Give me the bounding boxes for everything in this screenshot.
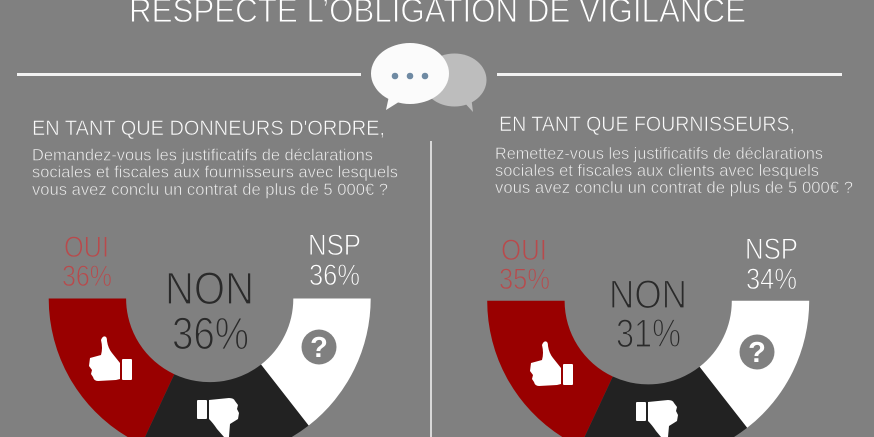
icon: thumb down <box>197 398 239 437</box>
icon: question mark: ? <box>748 337 766 369</box>
label: nsp: NSP <box>308 229 361 262</box>
label: nsp <box>308 229 361 292</box>
donut chart: fournisseurs <box>487 301 809 437</box>
label: oui: 36% <box>62 260 112 293</box>
icon: question mark <box>740 334 774 370</box>
segment: non <box>584 367 747 437</box>
panel: donneurs d'ordre <box>32 116 398 437</box>
icon: question mark <box>302 330 336 364</box>
label: oui <box>499 234 550 296</box>
heading: donneurs d'ordre: EN TANT QUE DONNEURS D'ORDRE, <box>32 116 385 140</box>
label: nsp: NSP <box>745 233 798 266</box>
label: oui: 35% <box>499 263 550 296</box>
label: oui <box>62 231 112 293</box>
question text: fournisseurs: vous avez conclu un contrat de plus de 5 000€ ? <box>495 178 853 197</box>
panel: fournisseurs <box>487 112 853 437</box>
segment: nsp <box>261 298 371 426</box>
label: nsp <box>745 233 798 296</box>
segment: nsp <box>700 301 809 428</box>
question text: donneurs d'ordre: sociales et fiscales aux fournisseurs avec lesquels <box>32 162 398 182</box>
label: non: 31% <box>616 312 681 356</box>
question text: donneurs d'ordre <box>32 146 398 199</box>
question text: fournisseurs: Remettez-vous les justificatifs de déclarations <box>495 144 823 163</box>
heading: fournisseurs: EN TANT QUE FOURNISSEURS, <box>499 112 795 136</box>
donut chart: donneurs d'ordre <box>49 298 371 437</box>
label: nsp: 36% <box>309 259 360 292</box>
label: non <box>165 263 254 359</box>
label: oui: OUI <box>64 231 109 264</box>
icon: thumb down <box>636 400 678 437</box>
label: nsp: 34% <box>746 263 797 296</box>
question text: donneurs d'ordre: vous avez conclu un contrat de plus de 5 000€ ? <box>32 180 388 199</box>
label: non: NON <box>609 273 687 317</box>
label: non: NON <box>165 263 254 314</box>
icon: thumb up <box>89 336 132 381</box>
question text: fournisseurs: sociales et fiscales aux clients avec lesquels <box>495 161 819 180</box>
segment: oui <box>487 301 613 437</box>
icon: question mark: ? <box>310 332 328 364</box>
label: oui: OUI <box>501 234 547 267</box>
segment: oui <box>49 298 174 437</box>
question text: donneurs d'ordre: Demandez-vous les justificatifs de déclarations <box>32 146 373 164</box>
question text: fournisseurs <box>495 144 853 197</box>
label: non: 36% <box>172 308 249 359</box>
icon: speech bubbles <box>371 43 486 112</box>
label: non <box>609 273 687 356</box>
segment: non <box>145 364 309 437</box>
icon: thumb up <box>530 341 573 386</box>
